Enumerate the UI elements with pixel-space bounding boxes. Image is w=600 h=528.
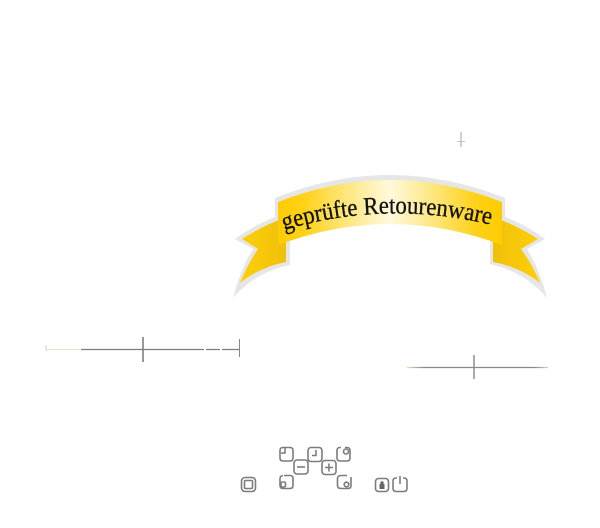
icon: square stop button [242, 478, 256, 492]
icon: top centre key [308, 448, 322, 462]
icon group: device controls [242, 448, 407, 492]
left ribbon tail [240, 220, 286, 283]
icon: small crosshair mark [457, 132, 465, 147]
icon: top right key [337, 448, 350, 461]
icon: bottom left key [280, 476, 293, 488]
right horizontal scale line [407, 355, 548, 379]
icon: minus key [294, 460, 308, 474]
ribbon main band [278, 180, 502, 245]
ribbon text: geprüfte Retourenware [282, 198, 492, 234]
left horizontal scale line [46, 337, 240, 362]
icon: bottom right key [338, 476, 351, 488]
icon: power key [393, 476, 407, 492]
ribbon grey outline [233, 175, 547, 298]
icon: plus key [322, 460, 336, 474]
right ribbon tail [493, 220, 540, 283]
ribbon banner [233, 175, 547, 298]
icon: top left key [280, 448, 293, 461]
icon: lock key [376, 478, 388, 492]
